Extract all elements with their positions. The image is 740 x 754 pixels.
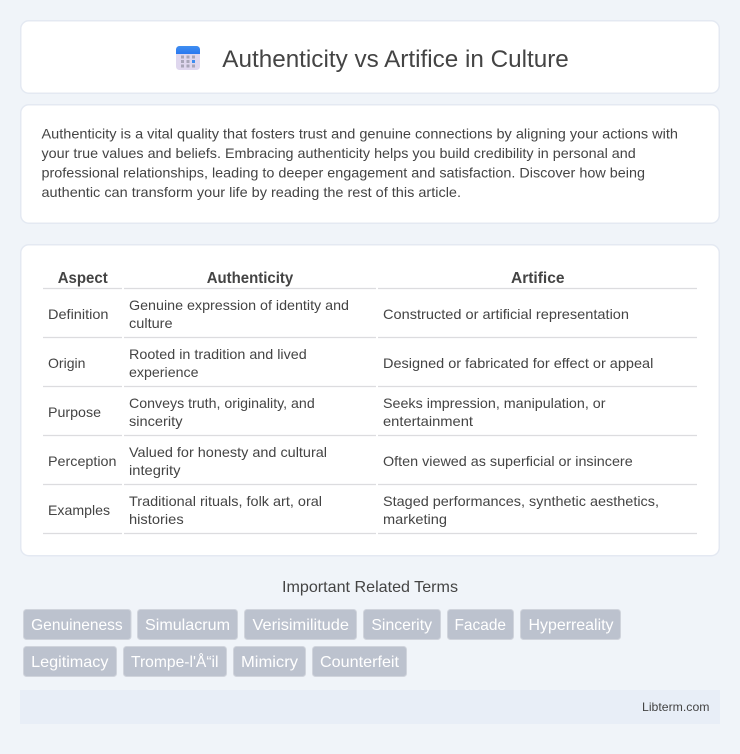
row: examples: Traditional rituals, folk art, oral [129,493,322,509]
tag: Counterfeit: Counterfeit [320,654,400,671]
tag: Mimicry: Mimicry [241,654,298,671]
tag: Simulacrum [138,610,238,640]
row: origin: Origin [48,355,86,371]
intro paragraph text: professional relationships, leading to deeper engagement and satisfaction. Discover how being [42,164,645,180]
tag: Counterfeit [312,646,406,676]
row: perception: Perception [48,453,117,469]
footer credit: Libterm.com [642,700,710,714]
row: definition [43,297,697,338]
row: perception: integrity [129,462,180,478]
related terms tags [24,610,620,676]
tag: Facade: Facade [454,617,506,634]
row: origin: experience [129,364,199,380]
intro paragraph text: authentic can transform your life by reading the rest of this article. [42,184,461,200]
tag: Facade [448,610,514,640]
row: purpose: entertainment [383,413,473,429]
tag: Hyperreality: Hyperreality [528,617,614,634]
icon: calendar [176,46,200,70]
tag: Hyperreality [520,610,620,640]
tag: Trompe-l'Å“il [124,646,226,676]
tag: Verisimilitude [244,610,356,640]
row: perception [43,444,697,484]
row: purpose: sincerity [129,413,182,429]
row: examples: Staged performances, synthetic aesthetics, [383,493,659,509]
row: purpose [43,395,697,436]
row: examples [43,493,697,534]
tag: Legitimacy [24,646,116,676]
row: perception: Often viewed as superficial or insincere [383,453,633,469]
row: purpose: Conveys truth, originality, and [129,395,315,411]
related terms heading: Important Related Terms [282,579,458,596]
tag: Trompe-l'Å“il: Trompe-l'Å“il [131,652,218,671]
tag: Sincerity [364,610,440,640]
table header row [43,270,697,288]
intro paragraph text: your true values and beliefs. Embracing authenticity helps you build credibility in personal and [42,145,636,161]
tag: Mimicry [234,646,306,676]
row: purpose: Seeks impression, manipulation, or [383,395,606,411]
row: perception: Valued for honesty and cultural [129,444,327,460]
row: origin: Designed or fabricated for effect or appeal [383,355,653,371]
row: definition: culture [129,315,173,331]
row: origin: Rooted in tradition and lived [129,346,307,362]
table header row: Aspect [58,270,108,287]
tag: Sincerity: Sincerity [371,617,432,634]
row: purpose: Purpose [48,404,101,420]
intro paragraph text [42,126,678,200]
table header row: Artifice [511,270,565,287]
row: examples: Examples [48,502,110,518]
row: origin [43,346,697,386]
tag: Simulacrum: Simulacrum [145,617,230,634]
tag: Genuineness: Genuineness [31,617,123,634]
tag: Verisimilitude: Verisimilitude [252,617,349,634]
header panel [21,21,719,93]
row: definition: Constructed or artificial representation [383,306,629,322]
intro paragraph text: Authenticity is a vital quality that fosters trust and genuine connections by aligning your actions with [42,126,678,142]
row: examples: marketing [383,511,447,527]
table header row: Authenticity [207,270,293,287]
title: Authenticity vs Artifice in Culture [222,46,569,73]
row: definition: Genuine expression of identity and [129,297,349,313]
row: examples: histories [129,511,184,527]
tag: Legitimacy: Legitimacy [31,654,109,671]
footer bar [20,690,720,724]
tag: Genuineness [24,610,131,640]
row: definition: Definition [48,306,108,322]
intro paragraph panel [21,105,719,223]
comparison table panel [21,245,719,556]
